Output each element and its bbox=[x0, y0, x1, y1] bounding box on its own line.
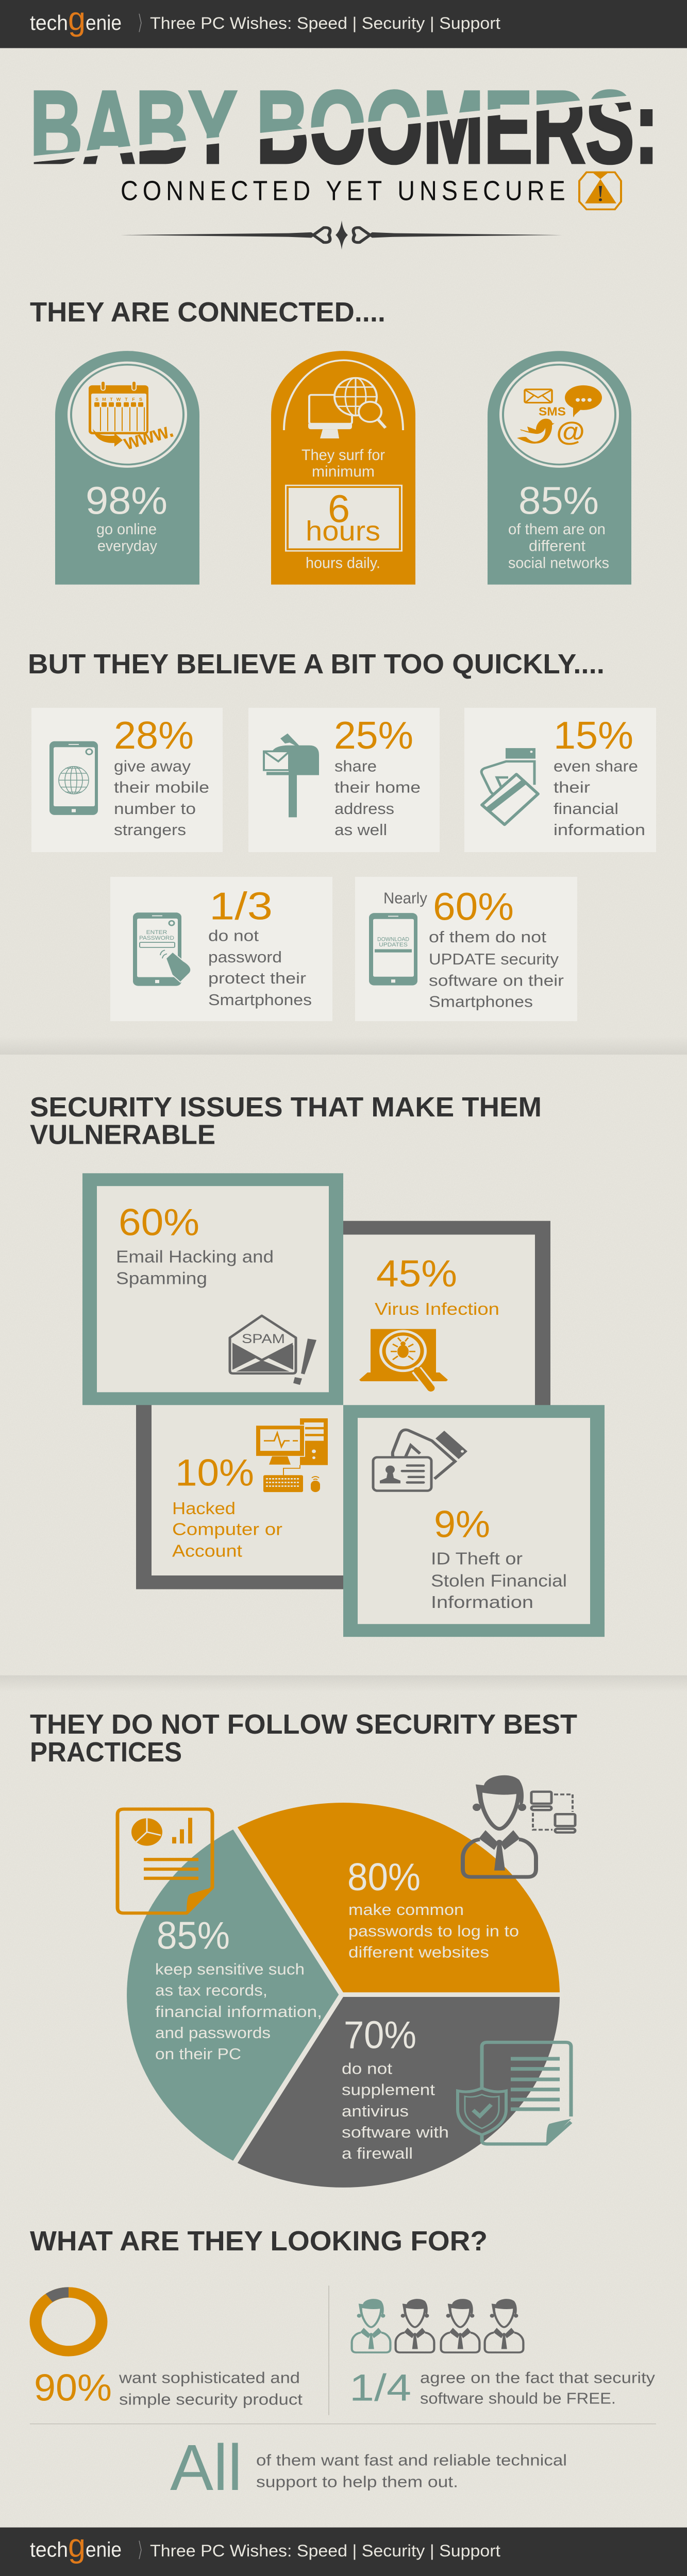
icon: id card and hand bbox=[373, 1430, 467, 1490]
footer bar bbox=[0, 2527, 687, 2576]
panel: 6 hours daily bbox=[271, 351, 415, 585]
footer logo: enie bbox=[86, 2538, 122, 2562]
heading: what are they looking for: WHAT ARE THEY LOOKING FOR? bbox=[30, 2226, 488, 2257]
callout: 6 hours: 6 bbox=[328, 487, 350, 531]
icon: calendar: F bbox=[132, 397, 135, 402]
panel: 98% go online: 98% bbox=[86, 479, 167, 522]
panel: 28% mobile number: give away bbox=[114, 757, 191, 775]
panel: 28% mobile number: number to bbox=[114, 800, 196, 818]
panel: 10% hacked computer: Account bbox=[172, 1541, 242, 1561]
icon: social bbox=[517, 385, 602, 447]
panel: 25% home address: as well bbox=[334, 821, 387, 839]
panel: 45% virus: Virus Infection bbox=[375, 1299, 499, 1319]
dark frame bbox=[144, 1228, 543, 1582]
panel: 1/3 no password: password bbox=[208, 948, 282, 966]
icon: hand with card bbox=[481, 748, 538, 825]
icon: man with computers bbox=[463, 1775, 575, 1877]
pie label: 85%: financial information, bbox=[155, 2003, 322, 2021]
panel: 60% email hacking: 60% bbox=[119, 1201, 199, 1243]
icon: social: @ bbox=[556, 416, 585, 447]
ornament divider bbox=[121, 221, 562, 250]
stat: 1/4 free software: 1/4 bbox=[349, 2367, 411, 2409]
pie label: 85%: on their PC bbox=[155, 2045, 241, 2063]
panel: 6 hours daily: hours daily. bbox=[306, 554, 380, 571]
icon: calendar: T bbox=[125, 397, 128, 402]
panel: 45% virus bbox=[359, 1253, 499, 1389]
subtitle: CONNECTED YET UNSECURE bbox=[121, 176, 565, 206]
panel: nearly 60% no updates: 60% bbox=[433, 885, 514, 928]
icon: calendar: www. bbox=[120, 418, 176, 454]
panel: 15% financial information: 15% bbox=[554, 714, 633, 757]
panel: 9% id theft: 9% bbox=[434, 1503, 490, 1545]
heading: they are connected: THEY ARE CONNECTED.... bbox=[30, 297, 386, 328]
stat: 90% sophisticated product: 90% bbox=[34, 2367, 112, 2409]
donut chart: 90% bbox=[36, 2287, 102, 2351]
heading: security issues: SECURITY ISSUES THAT MAKE THEM bbox=[30, 1092, 542, 1123]
icon: calendar: T bbox=[110, 397, 113, 402]
panel: 15% financial information bbox=[464, 708, 656, 852]
stat: all want support bbox=[170, 2431, 567, 2504]
footer tagline: Three PC Wishes: Speed | Security | Support bbox=[150, 2542, 501, 2560]
icon: social: SMS bbox=[539, 405, 566, 418]
panel: nearly 60% no updates: Smartphones bbox=[429, 993, 533, 1010]
pie label: 80%: passwords to log in to bbox=[348, 1922, 519, 1940]
panel: 98% go online: go online bbox=[96, 521, 157, 537]
panel: 25% home address: address bbox=[334, 800, 394, 818]
panel: 28% mobile number: their mobile bbox=[114, 778, 209, 796]
panel: 9% id theft: Stolen Financial bbox=[431, 1570, 567, 1590]
panel: 28% mobile number: 28% bbox=[114, 714, 194, 757]
panel: 28% mobile number bbox=[31, 708, 223, 852]
panel: 1/3 no password: 1/3 bbox=[209, 885, 273, 928]
pie label: 85%: keep sensitive such bbox=[155, 1960, 305, 1978]
stat: all want support: All bbox=[170, 2431, 242, 2504]
panel: 15% financial information: their bbox=[554, 778, 590, 796]
icon: calendar bbox=[89, 381, 176, 454]
pie label: 85%: and passwords bbox=[155, 2024, 271, 2042]
dividers bbox=[30, 2285, 656, 2424]
stat: 90% sophisticated product: want sophisticated and bbox=[119, 2369, 300, 2386]
pie label: 80%: make common bbox=[348, 1901, 464, 1918]
icon: laptop bug magnifier bbox=[359, 1329, 448, 1389]
icon: phone globe bbox=[49, 741, 98, 815]
panel: 15% financial information: financial bbox=[554, 800, 618, 818]
panel: 9% id theft: ID Theft or bbox=[431, 1549, 523, 1568]
title bbox=[34, 89, 652, 165]
panel: nearly 60% no updates bbox=[355, 877, 577, 1021]
icon: desktop computer bbox=[256, 1418, 328, 1492]
panel: 1/3 no password bbox=[110, 877, 332, 1021]
heading: but they believe: BUT THEY BELIEVE A BIT TOO QUICKLY.... bbox=[28, 649, 605, 680]
panel: security squares bbox=[90, 1180, 597, 1631]
heading: best practices: PRACTICES bbox=[30, 1737, 182, 1768]
panel: 6 hours daily: minimum bbox=[312, 463, 375, 480]
panel: 1/3 no password: do not bbox=[208, 927, 259, 944]
footer logo: g bbox=[68, 2527, 86, 2564]
icon: calendar: S bbox=[95, 397, 98, 402]
icon: document shield bbox=[458, 2042, 571, 2144]
pie label: 70%: supplement bbox=[342, 2081, 435, 2098]
panel: 15% financial information: information bbox=[554, 821, 645, 839]
icon: phone download updates: UPDATES bbox=[379, 942, 408, 948]
panel: 28% mobile number: strangers bbox=[114, 821, 186, 839]
callout: 6 hours bbox=[285, 485, 403, 552]
panel: 85% social networks: 85% bbox=[518, 479, 599, 522]
pie label: 70%: 70% bbox=[344, 2013, 416, 2057]
panel: 15% financial information: even share bbox=[554, 757, 638, 775]
icon: spam envelope: SPAM bbox=[242, 1332, 285, 1346]
panel: 1/3 no password: protect their bbox=[208, 970, 306, 987]
icon: calendar: S bbox=[139, 397, 142, 402]
heading: best practices bbox=[30, 1709, 577, 1768]
icon: monitor globe search bbox=[308, 378, 386, 438]
pie label: 80%: 80% bbox=[347, 1855, 421, 1899]
heading: best practices: THEY DO NOT FOLLOW SECURITY BEST bbox=[30, 1709, 577, 1740]
panel: 60% email hacking: Spamming bbox=[116, 1268, 207, 1288]
panel: 85% social networks: of them are on bbox=[508, 521, 606, 537]
pie label: 85% bbox=[155, 1914, 322, 2063]
header logo: g bbox=[68, 0, 86, 37]
icon: phone enter password bbox=[133, 912, 191, 986]
panel: 10% hacked computer bbox=[172, 1418, 328, 1561]
callout: 6 hours: hours bbox=[306, 516, 380, 547]
icon: phone enter password: ENTER bbox=[146, 930, 167, 936]
panel: 9% id theft: Information bbox=[431, 1592, 533, 1612]
icon: calendar: M bbox=[102, 397, 106, 402]
panel: 85% social networks: social networks bbox=[508, 554, 609, 571]
heading: security issues bbox=[30, 1092, 542, 1150]
stat: all want support: of them want fast and reliable technical bbox=[256, 2451, 567, 2469]
icon: four men bbox=[352, 2299, 523, 2352]
panel: nearly 60% no updates: Nearly bbox=[383, 889, 428, 907]
panel: 25% home address bbox=[248, 708, 440, 852]
panel: 98% go online bbox=[55, 351, 199, 585]
panel: 9% id theft bbox=[350, 1412, 597, 1631]
stat: 90% sophisticated product bbox=[34, 2367, 303, 2409]
pie label: 80%: different websites bbox=[348, 1943, 489, 1961]
panel: 25% home address: 25% bbox=[334, 714, 413, 757]
pie label: 70%: antivirus bbox=[342, 2103, 409, 2120]
panel: 60% email hacking bbox=[90, 1180, 336, 1399]
header tagline: Three PC Wishes: Speed | Security | Support bbox=[150, 14, 501, 33]
stat: 1/4 free software: agree on the fact that security bbox=[420, 2369, 656, 2386]
icon: phone download updates: DOWNLOAD bbox=[377, 937, 409, 942]
panel: nearly 60% no updates: software on their bbox=[429, 972, 564, 989]
panel: 98% go online: everyday bbox=[97, 537, 157, 554]
pie label: 80% bbox=[347, 1855, 519, 1961]
panel: nearly 60% no updates: UPDATE security bbox=[429, 951, 559, 968]
icon: document chart bbox=[118, 1809, 212, 1913]
pie label: 70%: software with bbox=[342, 2124, 449, 2141]
panel: 10% hacked computer: 10% bbox=[175, 1452, 254, 1494]
pie label: 85%: as tax records, bbox=[155, 1981, 267, 1999]
stat: 90% sophisticated product: simple security product bbox=[119, 2391, 303, 2408]
panel: nearly 60% no updates: of them do not bbox=[429, 928, 546, 946]
header logo: enie bbox=[86, 11, 122, 35]
panel: 1/3 no password: Smartphones bbox=[208, 991, 312, 1008]
panel: 85% social networks bbox=[488, 351, 631, 585]
panel: 10% hacked computer: Computer or bbox=[172, 1519, 282, 1539]
icon: phone download updates bbox=[369, 913, 417, 986]
header logo bbox=[30, 0, 141, 37]
pie label: 70% bbox=[342, 2013, 449, 2162]
pie chart bbox=[118, 1775, 575, 2188]
pie label: 70%: a firewall bbox=[342, 2145, 413, 2162]
panel: 25% home address: share bbox=[334, 757, 377, 775]
icon: warning bbox=[579, 172, 621, 209]
panel: 60% email hacking: Email Hacking and bbox=[116, 1247, 274, 1266]
stat: 1/4 free software: software should be FREE. bbox=[420, 2389, 616, 2407]
icon: calendar: W bbox=[116, 397, 121, 402]
header bar bbox=[0, 0, 687, 48]
footer logo: tech bbox=[30, 2538, 68, 2562]
icon: mailbox bbox=[264, 734, 319, 817]
pie label: 70%: do not bbox=[342, 2060, 392, 2077]
stat: all want support: support to help them out. bbox=[256, 2473, 458, 2490]
panel: 25% home address: their home bbox=[334, 778, 421, 796]
stat: 1/4 free software bbox=[349, 2367, 656, 2409]
icon: spam envelope bbox=[230, 1316, 316, 1385]
footer logo bbox=[30, 2527, 141, 2564]
panel: 10% hacked computer: Hacked bbox=[172, 1498, 236, 1518]
pie label: 85%: 85% bbox=[157, 1914, 230, 1957]
panel: 85% social networks: different bbox=[529, 537, 585, 554]
panel: 45% virus: 45% bbox=[376, 1253, 457, 1295]
heading: security issues: VULNERABLE bbox=[30, 1120, 215, 1150]
icon: phone enter password: PASSWORD bbox=[139, 935, 174, 941]
header logo: tech bbox=[30, 11, 68, 35]
panel: 6 hours daily: They surf for bbox=[301, 446, 385, 463]
